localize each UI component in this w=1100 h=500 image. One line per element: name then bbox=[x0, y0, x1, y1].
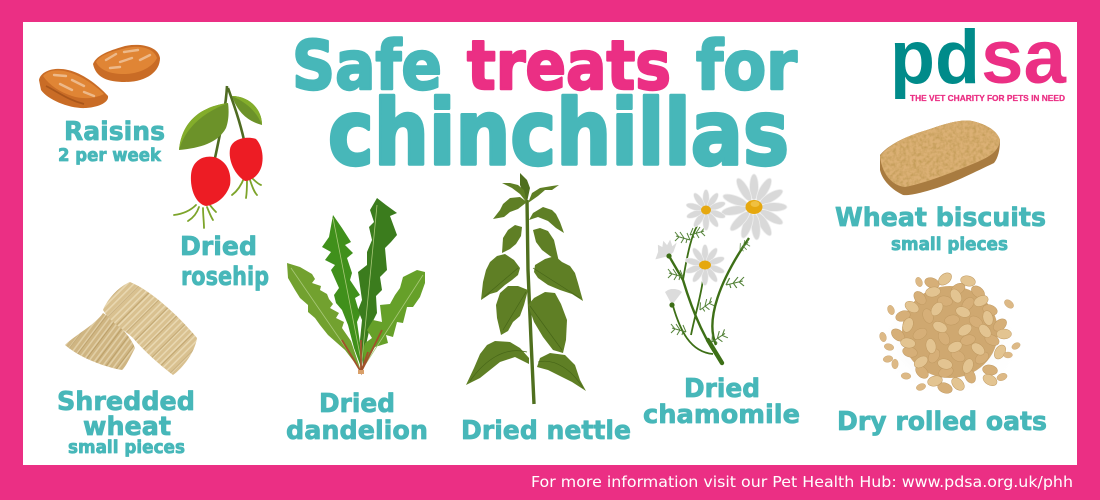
label: dandelion: dandelion bbox=[286, 416, 428, 446]
footer text: For more information visit our Pet Health Hub: www.pdsa.org.uk/phh bbox=[531, 473, 1073, 491]
label: shredded wheat bbox=[57, 387, 195, 458]
label: nettle: Dried nettle bbox=[461, 416, 631, 446]
big flower bbox=[721, 174, 787, 240]
label: chamomile bbox=[643, 374, 800, 430]
buds bbox=[652, 239, 679, 261]
logo: pdsa: pd bbox=[890, 15, 980, 100]
label: wheat biscuits bbox=[835, 203, 1046, 255]
label: raisins: 2 per week bbox=[58, 146, 161, 166]
icon: rolled oats bbox=[875, 270, 1025, 397]
stems bbox=[669, 226, 749, 363]
small flower bbox=[685, 190, 726, 230]
label: chamomile: Dried bbox=[684, 374, 760, 404]
label: dandelion bbox=[286, 389, 428, 446]
logo: pdsa bbox=[890, 15, 1067, 103]
icon: shredded wheat bbox=[65, 282, 197, 375]
mid flower bbox=[684, 244, 725, 286]
title: chinchillas bbox=[328, 81, 789, 186]
logo: pdsa: sa bbox=[981, 15, 1067, 100]
icon: dandelion bbox=[287, 198, 425, 374]
title: treats bbox=[467, 27, 671, 106]
scattered flakes bbox=[879, 276, 1021, 392]
label: rosehip: rosehip bbox=[181, 262, 269, 292]
flakes: light tone bbox=[900, 270, 1012, 393]
label: rolled oats: Dry rolled oats bbox=[837, 407, 1047, 437]
label: shredded wheat: small pieces bbox=[68, 438, 185, 458]
label: rosehip: Dried bbox=[180, 232, 257, 262]
title: Safe bbox=[292, 27, 442, 106]
label: shredded wheat: Shredded bbox=[57, 387, 195, 417]
icon: wheat biscuit bbox=[880, 121, 1000, 195]
sprigs bbox=[668, 269, 683, 280]
label: wheat biscuits: Wheat biscuits bbox=[835, 203, 1046, 233]
flakes: mid tone bbox=[889, 276, 1009, 395]
label: chamomile: chamomile bbox=[643, 400, 800, 430]
label: raisins bbox=[58, 117, 165, 166]
label: dandelion: Dried bbox=[319, 389, 395, 419]
logo: pdsa: THE VET CHARITY FOR PETS IN NEED bbox=[910, 93, 1065, 103]
label: shredded wheat: wheat bbox=[83, 412, 171, 442]
icon: raisins bbox=[39, 45, 160, 108]
icon: rosehip bbox=[174, 86, 263, 228]
label: raisins: Raisins bbox=[64, 117, 165, 147]
title: for bbox=[696, 27, 797, 106]
icon: nettle bbox=[466, 173, 586, 404]
icon: chamomile bbox=[652, 174, 787, 363]
label: wheat biscuits: small pieces bbox=[891, 235, 1008, 255]
title bbox=[292, 27, 797, 186]
label: rosehip bbox=[180, 232, 269, 292]
